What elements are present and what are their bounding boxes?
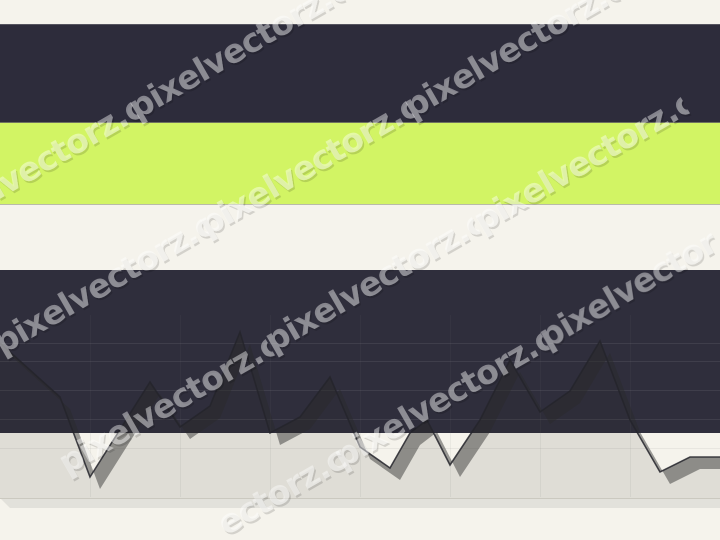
lower dark band bbox=[0, 270, 720, 433]
watermark text: ectorz.c bbox=[210, 438, 353, 540]
watermark text: pixelvectorz.c bbox=[192, 86, 426, 244]
watermark text: pixelvectorz.c bbox=[326, 318, 561, 476]
lime band bbox=[0, 122, 720, 205]
data line bbox=[0, 332, 720, 477]
chart baseline shadow bbox=[0, 498, 720, 508]
line shadow band bbox=[0, 332, 720, 489]
line chart bbox=[0, 315, 720, 508]
watermark text: pixelvectorz.c bbox=[466, 82, 701, 240]
watermark text: pixelvectorz.c bbox=[52, 324, 286, 482]
chart bottom axis bbox=[0, 498, 720, 499]
area under the line bbox=[0, 332, 720, 498]
watermark text: pixelvectorz.c bbox=[258, 202, 492, 360]
top dark band bbox=[0, 24, 720, 123]
watermark text: pixelvector bbox=[532, 222, 720, 356]
chart grid bbox=[0, 315, 720, 497]
